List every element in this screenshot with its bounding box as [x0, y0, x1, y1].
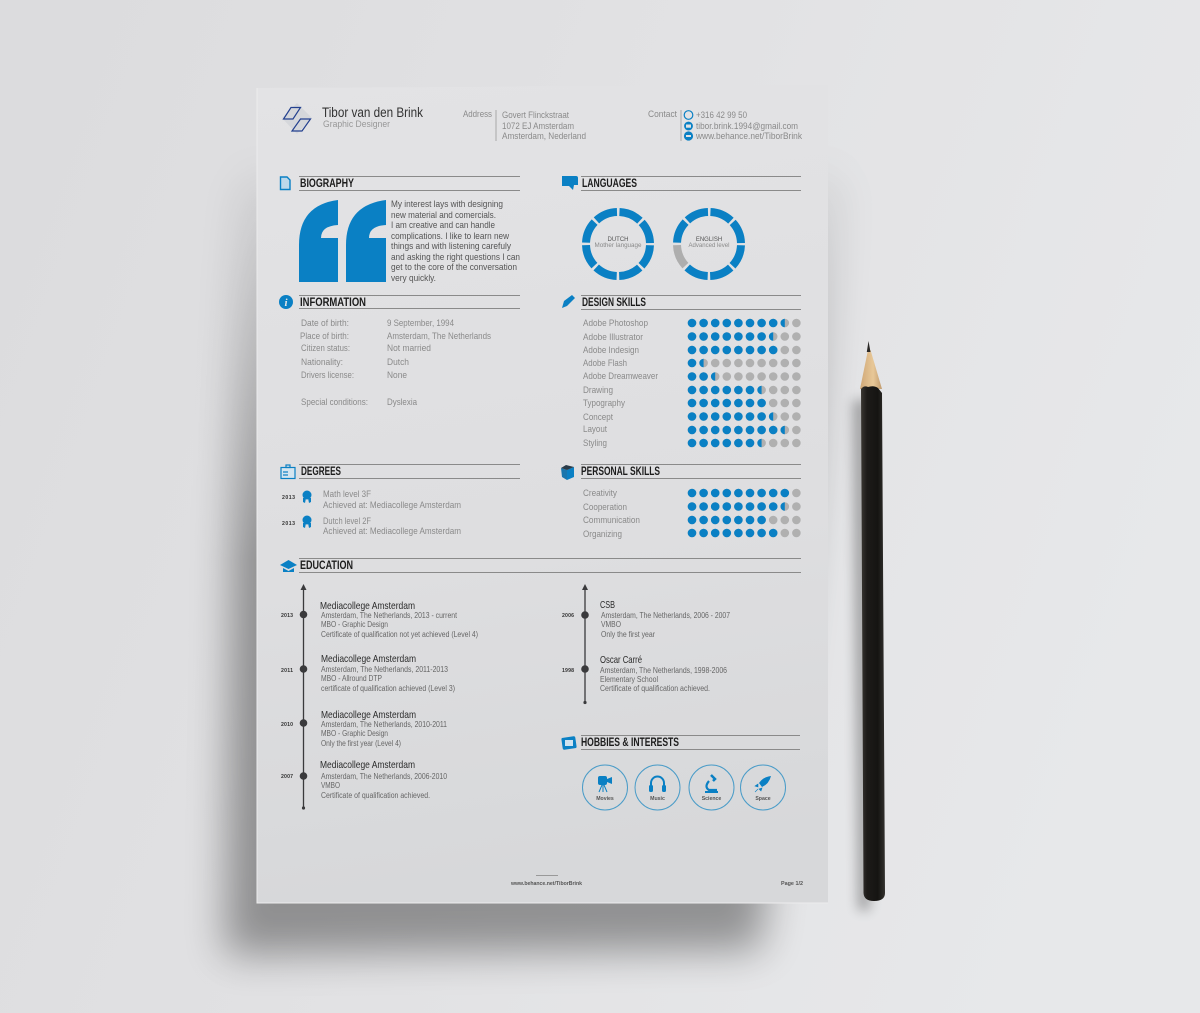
heading: degrees: DEGREES — [301, 466, 341, 478]
entry: mediacollege 2013: Certificate of qualification not yet achieved (Level 4) — [321, 630, 478, 639]
icon: pencil — [562, 295, 575, 308]
icon: graduation cap — [280, 560, 297, 572]
hobby: science — [689, 765, 734, 810]
skill labels: Styling — [583, 438, 607, 448]
entry: csb: CSB — [600, 600, 615, 611]
chart: dutch ring: DUTCH — [608, 237, 628, 243]
degree: dutch: Achieved at: Mediacollege Amsterdam — [323, 526, 461, 536]
icon: chat bubbles — [562, 176, 578, 190]
degree: dutch — [282, 516, 461, 536]
job title: Graphic Designer — [323, 119, 390, 130]
pencil shadow — [853, 400, 870, 910]
panel: hobbies and interests — [561, 736, 800, 810]
skill labels: Cooperation — [583, 502, 627, 512]
panel: personal skills — [561, 464, 801, 539]
heading: languages: LANGUAGES — [582, 178, 637, 190]
information values: Dutch — [387, 357, 409, 367]
biography text: new material and comercials. — [391, 210, 496, 220]
address block: Address — [463, 109, 492, 119]
address block — [463, 109, 586, 141]
panel: education — [280, 558, 801, 810]
entry: mediacollege 2007: Certificate of qualification achieved. — [321, 791, 430, 800]
entry: mediacollege 2011 — [321, 654, 455, 693]
hobby: space — [740, 765, 786, 810]
entry: mediacollege 2007: Mediacollege Amsterdam — [320, 760, 415, 771]
entry: mediacollege 2011: MBO - Allround DTP — [321, 674, 382, 683]
entry: mediacollege 2013: Amsterdam, The Netherlands, 2013 - current — [321, 611, 458, 620]
entry: mediacollege 2010: Mediacollege Amsterdam — [321, 710, 416, 721]
address block: Amsterdam, Nederland — [502, 131, 586, 141]
entry: mediacollege 2010: Amsterdam, The Netherlands, 2010-2011 — [321, 720, 447, 729]
timeline: left: 2013 — [281, 613, 293, 619]
pencil — [860, 341, 885, 901]
biography text: get to the core of the conversation — [391, 262, 517, 272]
entry: oscar carre: Certificate of qualification achieved. — [600, 684, 710, 693]
panel: degrees — [281, 464, 520, 536]
heading: design skills: DESIGN SKILLS — [582, 297, 646, 309]
information labels: Place of birth: — [300, 331, 349, 341]
heading: hobbies: HOBBIES & INTERESTS — [581, 737, 679, 749]
information labels: Nationality: — [301, 357, 343, 367]
biography text: I am creative and can handle — [391, 220, 495, 230]
skill labels: Layout — [583, 424, 607, 434]
degree: math — [282, 489, 461, 510]
heading: education: EDUCATION — [300, 560, 353, 572]
biography text: and asking the right questions I can — [391, 252, 520, 262]
chart: dutch ring: Mother language — [594, 243, 642, 249]
information values: Amsterdam, The Netherlands — [387, 331, 491, 341]
icon: info — [279, 295, 293, 309]
hobby: space: Space — [755, 796, 771, 802]
skill labels: Adobe Indesign — [583, 345, 639, 355]
timeline: right: 2006 — [562, 613, 574, 619]
timeline: left — [281, 584, 307, 810]
entry: mediacollege 2011: certificate of qualification achieved (Level 3) — [321, 684, 455, 693]
biography text: complications. I like to learn new — [391, 231, 509, 241]
biography text: My interest lays with designing — [391, 199, 503, 209]
biography text — [391, 199, 520, 283]
entry: mediacollege 2007: VMBO — [321, 781, 340, 790]
skill labels: Typography — [583, 398, 625, 408]
skill labels: Drawing — [583, 385, 613, 395]
degree: math: 2013 — [282, 495, 295, 501]
information labels — [300, 318, 368, 407]
address block: 1072 EJ Amsterdam — [502, 121, 574, 131]
heading: personal skills: PERSONAL SKILLS — [581, 466, 660, 478]
panel: languages — [562, 176, 801, 276]
entry: mediacollege 2010: MBO - Graphic Design — [321, 729, 388, 738]
contact block: +316 42 99 50 — [696, 110, 747, 120]
panel: biography — [280, 176, 520, 283]
entry: mediacollege 2011: Mediacollege Amsterdam — [321, 654, 416, 665]
heading: biography: BIOGRAPHY — [300, 178, 354, 190]
information values: Dyslexia — [387, 397, 418, 407]
address block: Govert Flinckstraat — [502, 110, 569, 120]
entry: oscar carre: Elementary School — [600, 675, 658, 684]
entry: csb: VMBO — [601, 620, 621, 629]
degree: dutch: Dutch level 2F — [323, 516, 371, 526]
entry: csb: Amsterdam, The Netherlands, 2006 - 2007 — [601, 611, 730, 620]
entry: mediacollege 2007 — [320, 760, 447, 800]
hobby: music: Music — [650, 796, 665, 802]
skill labels: Adobe Flash — [583, 358, 627, 368]
dot rating chart: design skills — [692, 319, 796, 447]
dot rating chart: personal skills — [692, 493, 796, 533]
chart: dutch ring — [586, 212, 650, 276]
contact block: Contact — [648, 109, 677, 119]
paper shadow — [225, 170, 845, 955]
chart: english ring: ENGLISH — [696, 237, 722, 243]
contact block — [648, 109, 802, 141]
information labels: Drivers license: — [301, 370, 354, 380]
skill labels: Adobe Photoshop — [583, 318, 648, 328]
entry: oscar carre — [600, 655, 727, 693]
information values: Not married — [387, 343, 431, 353]
entry: mediacollege 2013: MBO - Graphic Design — [321, 620, 388, 629]
entry: mediacollege 2013: Mediacollege Amsterdam — [320, 601, 415, 612]
heading: information: INFORMATION — [300, 297, 366, 309]
entry: csb — [600, 600, 730, 639]
hobby: science: Science — [702, 796, 721, 802]
icon: info: i — [284, 297, 288, 309]
degree: dutch: 2013 — [282, 521, 295, 527]
footer — [510, 876, 803, 887]
skill labels: Adobe Illustrator — [583, 332, 643, 342]
skill labels — [583, 318, 658, 448]
hobby: movies — [582, 765, 628, 810]
biography text: very quickly. — [391, 273, 436, 283]
name: Tibor van den Brink — [322, 105, 423, 120]
skill labels: Creativity — [583, 488, 617, 498]
information labels: Citizen status: — [301, 343, 350, 353]
footer: Page 1/2 — [781, 881, 803, 887]
skill labels — [583, 488, 640, 539]
entry: oscar carre: Oscar Carré — [600, 655, 642, 666]
timeline: right: 1998 — [562, 668, 574, 674]
panel: design skills — [562, 295, 801, 448]
degree: math: Math level 3F — [323, 489, 371, 499]
skill labels: Communication — [583, 515, 640, 525]
timeline: left: 2011 — [281, 668, 293, 674]
information values: 9 September, 1994 — [387, 318, 454, 328]
icon: id card — [281, 465, 295, 478]
skill labels: Adobe Dreamweaver — [583, 371, 658, 381]
icon: box — [561, 465, 574, 480]
footer: www.behance.net/TiborBrink — [510, 881, 582, 887]
entry: mediacollege 2011: Amsterdam, The Netherlands, 2011-2013 — [321, 665, 448, 674]
panel: information — [279, 295, 520, 407]
icon: document — [280, 177, 290, 190]
icon: photos — [561, 736, 577, 750]
information labels: Special conditions: — [301, 397, 368, 407]
contact block: www.behance.net/TiborBrink — [695, 131, 802, 141]
timeline: right — [562, 584, 589, 704]
information values — [387, 318, 491, 407]
resume page — [257, 85, 828, 903]
entry: mediacollege 2010: Only the first year (Level 4) — [321, 739, 401, 748]
entry: csb: Only the first year — [601, 630, 655, 639]
degree: math: Achieved at: Mediacollege Amsterdam — [323, 500, 461, 510]
icon: quotation marks — [299, 200, 386, 282]
contact block: tibor.brink.1994@gmail.com — [696, 121, 798, 131]
logo icon — [282, 103, 312, 134]
information values: None — [387, 370, 407, 380]
chart: english ring: Advanced level — [688, 243, 730, 249]
skill labels: Concept — [583, 412, 613, 422]
entry: oscar carre: Amsterdam, The Netherlands, 1998-2006 — [600, 666, 727, 675]
timeline: left: 2010 — [281, 722, 293, 728]
hobby: movies: Movies — [596, 796, 614, 802]
entry: mediacollege 2010 — [321, 710, 447, 748]
skill labels: Organizing — [583, 529, 622, 539]
entry: mediacollege 2013 — [320, 601, 478, 639]
timeline: left: 2007 — [281, 774, 293, 780]
biography text: things and with listening carefuly — [391, 241, 511, 251]
entry: mediacollege 2007: Amsterdam, The Netherlands, 2006-2010 — [321, 772, 447, 781]
chart: english ring — [677, 212, 741, 276]
hobby: music — [635, 765, 680, 810]
information labels: Date of birth: — [301, 318, 349, 328]
